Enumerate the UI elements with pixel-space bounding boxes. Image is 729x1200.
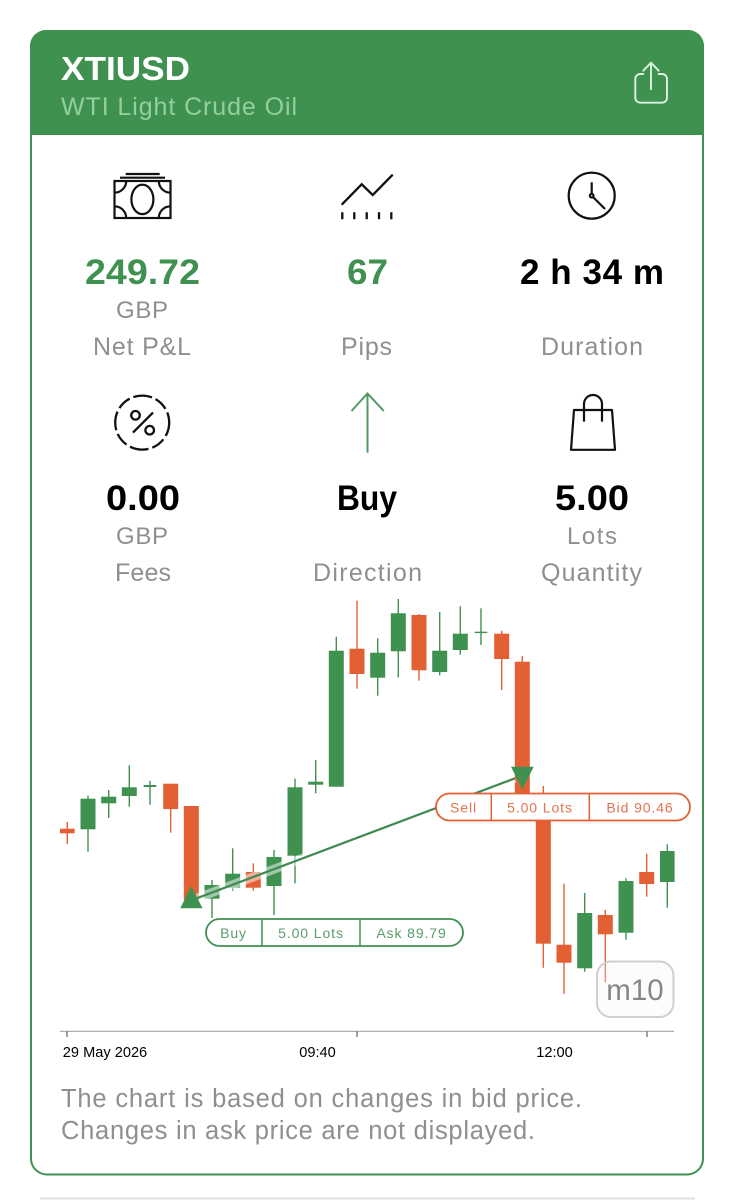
stat: duration	[520, 253, 664, 361]
stat: net P&L: GBP	[116, 297, 168, 324]
icon: banknote	[114, 174, 170, 218]
stat: direction: Direction	[313, 559, 422, 587]
footnote: The chart is based on changes in bid price.	[61, 1085, 582, 1113]
stat: quantity: Lots	[567, 523, 617, 550]
stat: fees: 0.00	[106, 479, 180, 518]
stat: pips	[341, 253, 392, 361]
sell order label: 5.00 Lots	[507, 800, 573, 816]
stat: direction: Buy	[337, 479, 397, 518]
footnote: Changes in ask price are not displayed.	[61, 1117, 535, 1145]
buy order label: 5.00 Lots	[278, 925, 344, 941]
sell order label: Sell	[450, 800, 477, 816]
stat: quantity	[541, 479, 642, 587]
candlestick chart	[60, 599, 675, 994]
stat: quantity: Quantity	[541, 559, 642, 587]
stat: direction	[313, 479, 422, 587]
stat: fees: Fees	[115, 559, 171, 587]
stat: net P&L: 249.72	[85, 253, 200, 292]
stat: fees: GBP	[116, 523, 168, 550]
time axis: 09:40	[299, 1045, 336, 1061]
buy order label: Ask 89.79	[376, 925, 447, 941]
buy order label	[206, 919, 463, 946]
subtitle: instrument name: WTI Light Crude Oil	[61, 93, 297, 121]
icon: share	[635, 63, 667, 103]
sell order label: Bid 90.46	[606, 800, 674, 816]
icon: up arrow	[352, 393, 384, 453]
timeframe badge	[597, 962, 674, 1017]
sell marker triangle	[511, 767, 534, 789]
title: symbol: XTIUSD	[61, 51, 190, 88]
header band	[30, 30, 704, 135]
footnote	[61, 1085, 582, 1145]
stat: pips: Pips	[341, 333, 392, 361]
bottom divider	[40, 1198, 695, 1200]
buy marker triangle	[180, 886, 202, 908]
icon: shopping bag	[571, 395, 615, 450]
stat: fees	[106, 479, 180, 587]
timeframe badge: m10	[606, 974, 664, 1007]
icon: line chart	[342, 175, 393, 219]
stat: pips: 67	[347, 253, 388, 292]
buy order label: Buy	[220, 925, 247, 941]
stat: quantity: 5.00	[555, 479, 629, 518]
time axis: 12:00	[536, 1045, 573, 1061]
time axis	[60, 1031, 674, 1061]
trade line from buy to sell	[197, 778, 515, 898]
time axis: 29 May 2026	[63, 1045, 147, 1061]
stat: duration: 2 h 34 m	[520, 253, 664, 292]
icon: clock	[569, 173, 615, 219]
icon: percent fees	[115, 396, 169, 450]
stat: net P&L: Net P&L	[93, 333, 191, 361]
stat: net P&L	[85, 253, 200, 361]
sell order label	[436, 794, 690, 820]
stat: duration: Duration	[541, 333, 643, 361]
